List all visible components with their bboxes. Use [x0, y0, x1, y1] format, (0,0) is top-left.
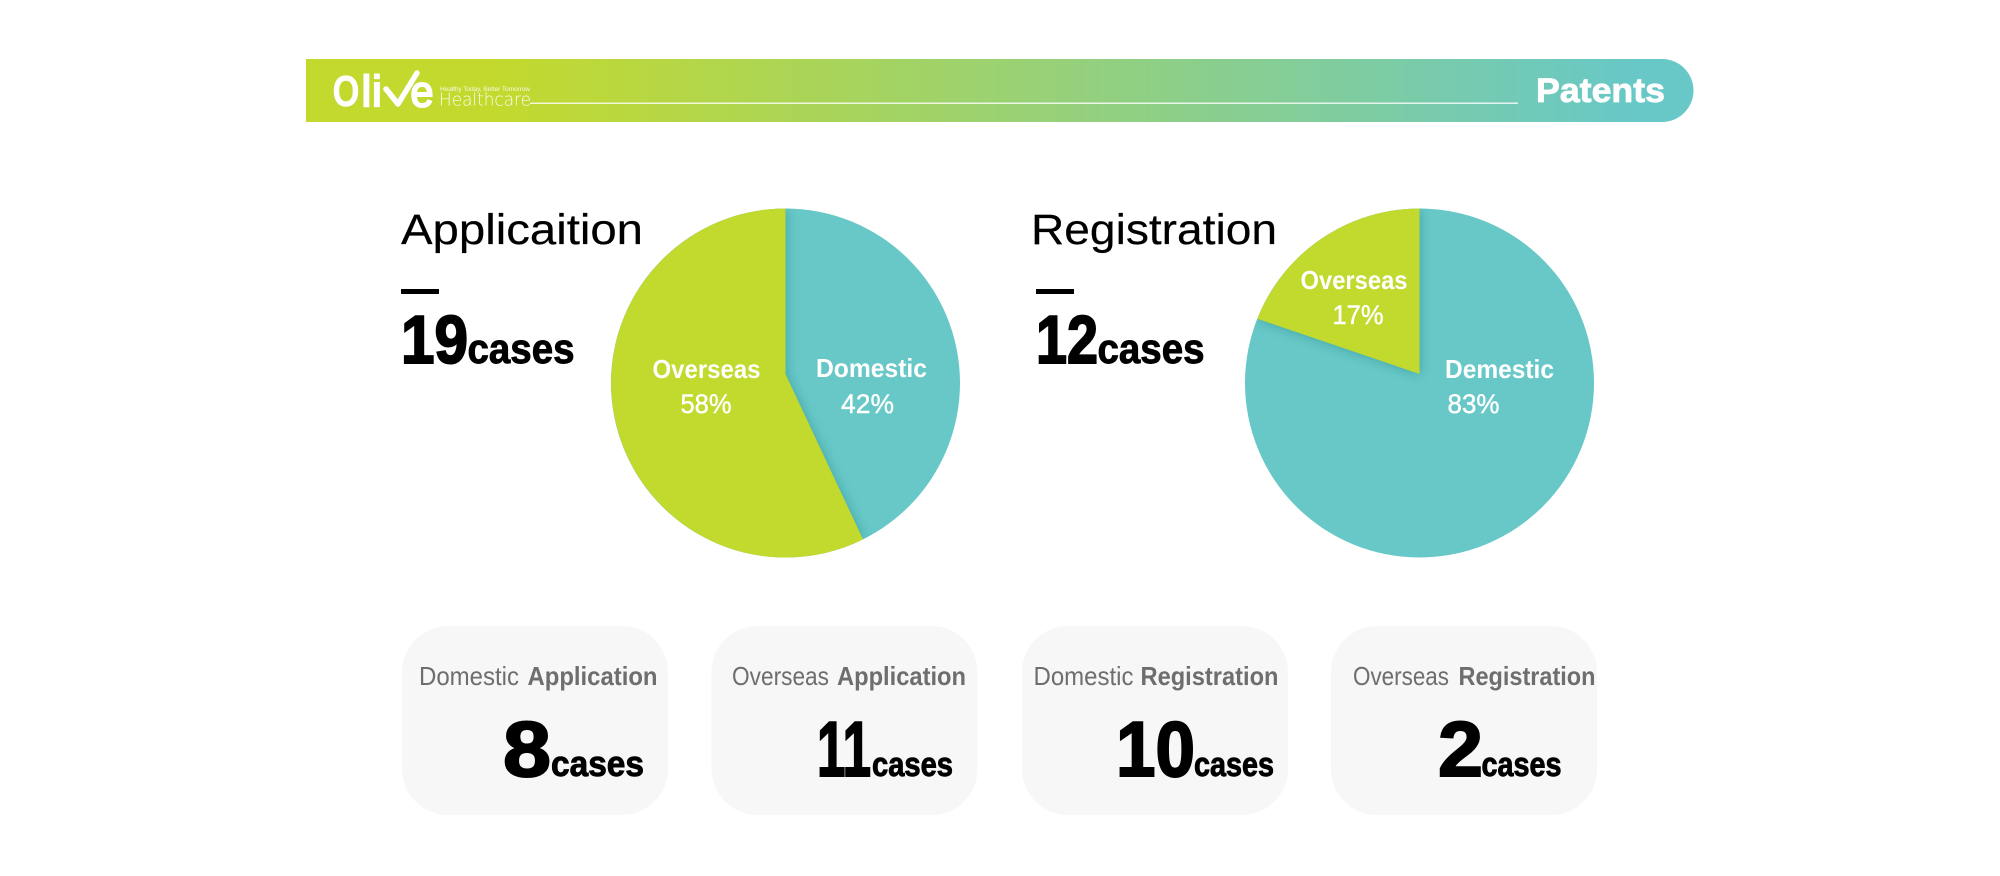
label: overseas 17%: Overseas [1300, 265, 1408, 295]
logo: Olive Healthcare: Healthcare [439, 90, 531, 110]
card: overseas registration: Overseas [1353, 661, 1449, 691]
logo: Olive Healthcare [332, 67, 531, 116]
card: overseas registration: Registration [1458, 661, 1596, 691]
label: domestic 42%: 42% [841, 389, 894, 419]
header title: Patents [1536, 72, 1665, 110]
panel: registration summary [1031, 206, 1277, 378]
logo: Olive Healthcare: Healthy Today, Better Tomorrow [440, 86, 530, 93]
card: overseas registration [1331, 626, 1597, 815]
label: domestic 42% [816, 353, 927, 419]
card: overseas application: Overseas [732, 661, 829, 691]
card: overseas registration: cases [1482, 746, 1562, 784]
label: overseas 58%: 58% [680, 389, 732, 419]
logo: Olive Healthcare: O [332, 67, 360, 116]
pie chart: application [611, 208, 960, 558]
total: 12 cases: cases [1098, 325, 1204, 372]
label: overseas 58%: Overseas [652, 354, 760, 384]
card: overseas application: Application [837, 661, 966, 691]
card: overseas application: cases [872, 746, 953, 784]
label: demestic 83%: Demestic [1445, 354, 1554, 384]
panel: application summary [401, 206, 643, 378]
card: overseas application [712, 626, 978, 815]
total: 19 cases [401, 302, 574, 378]
label: overseas 58% [652, 354, 760, 419]
card: domestic registration: Registration [1140, 661, 1278, 691]
card: domestic registration: 10 [1116, 705, 1195, 793]
total: 12 cases [1036, 302, 1204, 378]
label: overseas 17%: 17% [1332, 300, 1384, 330]
label: demestic 83% [1445, 354, 1554, 419]
card: domestic application: Domestic [419, 661, 519, 691]
card: domestic registration [1022, 626, 1288, 815]
label: domestic 42%: Domestic [816, 353, 927, 383]
card: overseas registration: 2 [1438, 705, 1483, 793]
total: 12 cases: 12 [1036, 302, 1098, 378]
card: domestic application: Application [528, 661, 658, 691]
logo: Olive Healthcare: i [372, 67, 382, 116]
label: overseas 17% [1300, 265, 1408, 330]
card: domestic application: cases [551, 743, 644, 784]
pie chart: registration [1245, 208, 1594, 558]
total: 19 cases: 19 [401, 302, 468, 378]
total: 19 cases: cases [468, 325, 574, 372]
heading: registration: Registration [1031, 206, 1277, 254]
heading: application: Applicaition [401, 206, 643, 254]
card: domestic registration: Domestic [1034, 661, 1134, 691]
card: domestic application [402, 626, 668, 815]
header banner [306, 59, 1694, 122]
label: demestic 83%: 83% [1448, 389, 1500, 419]
card: domestic application: 8 [503, 705, 551, 793]
card: overseas application: 11 [817, 705, 871, 793]
card: domestic registration: cases [1194, 746, 1274, 784]
logo: Olive Healthcare: e [410, 68, 434, 116]
logo: Olive Healthcare: l [362, 67, 371, 116]
